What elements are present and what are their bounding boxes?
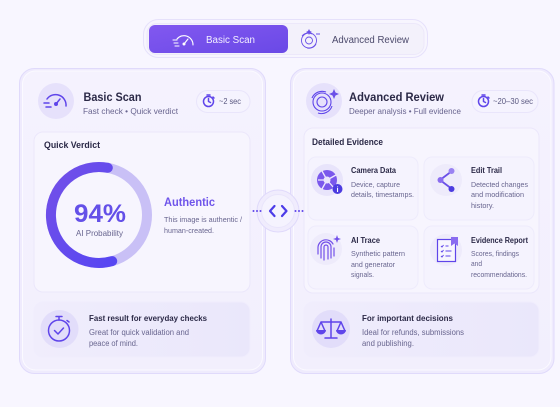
icon: speedometer: [38, 83, 74, 119]
connector: compare arrows: [252, 190, 304, 232]
card: edit trail: and modification: [471, 190, 524, 199]
panel: advanced review: [290, 68, 554, 374]
heading: quick verdict: Quick Verdict: [44, 140, 100, 150]
mode toggle: [144, 20, 428, 58]
card: ai trace: signals.: [351, 270, 374, 279]
card: ai trace: AI Trace: [351, 236, 381, 245]
card: edit trail: Edit Trail: [471, 166, 502, 175]
callout: important decisions: Ideal for refunds, submissions: [362, 328, 464, 337]
panel: basic scan: [20, 68, 266, 374]
time badge: advanced review: [472, 90, 538, 112]
heading: detailed evidence: Detailed Evidence: [312, 137, 383, 147]
active tab: basic scan: Basic Scan: [206, 35, 255, 46]
card: camera data: [308, 157, 418, 220]
callout: fast result: peace of mind.: [89, 339, 138, 348]
callout: fast result: [34, 302, 250, 357]
card: edit trail: history.: [471, 201, 494, 210]
card: ai trace: and generator: [351, 260, 395, 269]
active tab: basic scan: [149, 25, 288, 53]
card: camera data: Device, capture: [351, 180, 400, 189]
verdict: authentic: [164, 195, 243, 235]
heading: advanced review: Advanced Review: [349, 92, 444, 104]
card: ai trace: [308, 226, 418, 289]
time badge: basic scan: [196, 90, 250, 112]
donut chart: 94% AI probability: [51, 167, 147, 263]
callout: important decisions: [304, 302, 539, 357]
subtitle: basic scan: Fast check • Quick verdict: [83, 106, 179, 116]
time badge: advanced review: ~20–30 sec: [493, 97, 533, 106]
subtitle: advanced review: Deeper analysis • Full evidence: [349, 106, 461, 116]
icon: lens with sparkle: [306, 83, 342, 119]
callout: fast result: Great for quick validation and: [89, 328, 189, 337]
donut chart: 94% AI probability: 94%: [74, 200, 126, 228]
card: edit trail: [424, 157, 534, 220]
callout: fast result: Fast result for everyday checks: [89, 313, 207, 323]
card: evidence report: [424, 226, 534, 289]
card: edit trail: Detected changes: [471, 180, 528, 189]
time badge: basic scan: ~2 sec: [219, 97, 241, 106]
tab: advanced review: [302, 29, 410, 48]
card: camera data: i: [336, 185, 339, 194]
icon: scales: [312, 310, 350, 348]
verdict: authentic: This image is authentic /: [164, 215, 243, 224]
card: ai trace: Synthetic pattern: [351, 249, 405, 258]
callout: important decisions: For important decisions: [362, 313, 453, 323]
verdict: authentic: human-created.: [164, 226, 214, 235]
verdict: authentic: Authentic: [164, 195, 215, 209]
card: evidence report: and: [471, 259, 482, 268]
icon: stopwatch: [40, 310, 78, 348]
panel: detailed evidence: [304, 128, 539, 293]
panel: quick verdict: [34, 132, 250, 292]
callout: important decisions: and publishing.: [362, 339, 414, 348]
donut chart: 94% AI probability: AI Probability: [76, 228, 124, 238]
tab: advanced review: Advanced Review: [332, 35, 410, 46]
card: camera data: details, timestamps.: [351, 190, 414, 199]
card: evidence report: Evidence Report: [471, 236, 528, 245]
card: camera data: Camera Data: [351, 166, 396, 175]
card: evidence report: recommendations.: [471, 270, 527, 279]
heading: basic scan: Basic Scan: [84, 92, 142, 104]
card: evidence report: Scores, findings: [471, 249, 519, 258]
